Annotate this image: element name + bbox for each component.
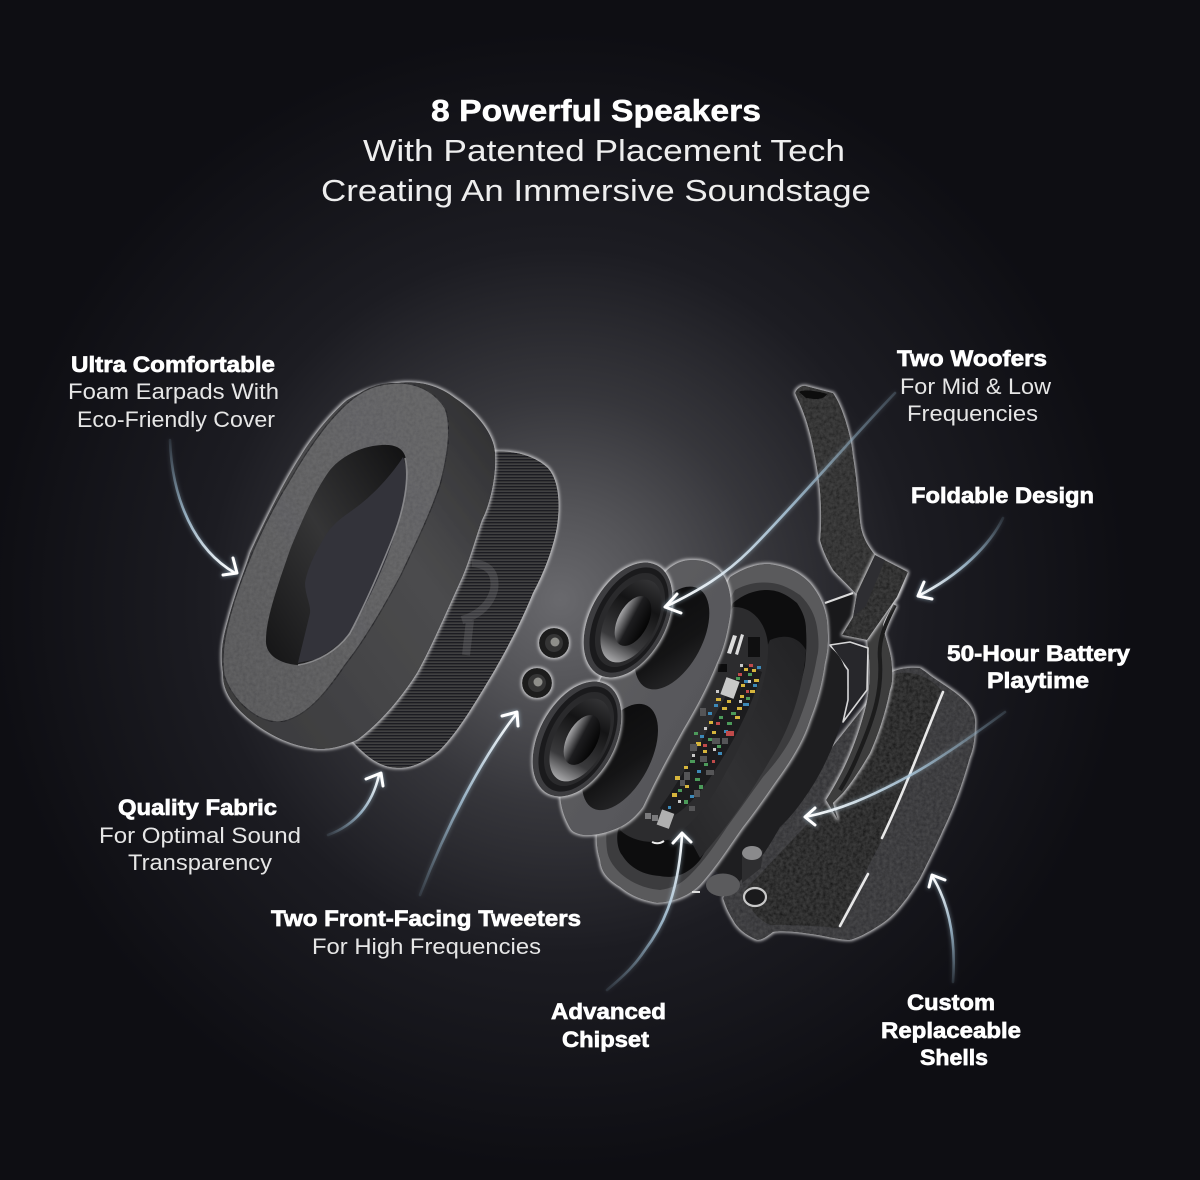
label: tweeters: Two Front-Facing Tweeters — [271, 906, 581, 931]
replaceable shell — [723, 668, 975, 940]
driver housing — [700, 640, 847, 885]
see-through gap — [830, 642, 868, 722]
bezel ring — [597, 564, 828, 903]
title block: With Patented Placement Tech — [363, 133, 845, 168]
label: shells: Custom — [907, 990, 995, 1015]
component shadow band — [660, 664, 762, 818]
fabric mesh disc — [353, 451, 559, 768]
label: ultra comfortable: Ultra Comfortable — [71, 352, 275, 377]
label: shells: Shells — [920, 1045, 988, 1070]
woofer upper — [565, 547, 691, 693]
woofer lower — [514, 666, 640, 812]
shell stripes — [840, 692, 943, 926]
label: tweeters: For High Frequencies — [312, 934, 541, 959]
black chip — [718, 664, 727, 672]
plate holes — [566, 574, 725, 822]
arrow: fabric — [328, 773, 383, 835]
label: quality fabric: Quality Fabric — [118, 795, 277, 820]
label: foldable design: Foldable Design — [911, 483, 1094, 508]
label: ultra comfortable: Eco-Friendly Cover — [77, 407, 275, 432]
speaker plate — [560, 560, 731, 835]
earpad inner cavity — [266, 445, 407, 665]
label: two woofers — [897, 346, 1051, 426]
small bottom chips — [645, 813, 658, 821]
foldable hinge cushion — [842, 555, 908, 640]
label: shells — [881, 990, 1021, 1070]
earpad front ring — [223, 383, 449, 722]
connector block — [825, 593, 870, 645]
arrow: earpads — [170, 440, 237, 575]
label: battery: Playtime — [987, 668, 1089, 693]
earpad — [222, 382, 495, 749]
label: quality fabric: Transparency — [128, 850, 272, 875]
arrow: battery — [805, 712, 1005, 825]
see-through opening — [298, 457, 407, 663]
label: two woofers: Frequencies — [907, 401, 1038, 426]
label: chipset: Chipset — [562, 1027, 650, 1052]
shell inner panel — [745, 673, 941, 928]
ear cup assembly — [514, 386, 975, 940]
icon: tweeters — [522, 628, 569, 698]
earpad side wall — [222, 382, 495, 749]
label: quality fabric: For Optimal Sound — [99, 823, 301, 848]
board components — [672, 668, 759, 797]
bottom chip — [657, 809, 674, 829]
label: two woofers: Two Woofers — [897, 346, 1047, 371]
label: chipset — [551, 999, 666, 1052]
arrow: shells — [929, 875, 954, 982]
board chip — [720, 677, 740, 699]
arrow: woofers — [665, 393, 895, 613]
label: two woofers: For Mid & Low — [900, 374, 1051, 399]
arrow: tweeters — [420, 712, 518, 895]
label: ultra comfortable: Foam Earpads With — [68, 379, 279, 404]
label: battery — [947, 641, 1131, 693]
arrow: chipset — [607, 833, 691, 990]
title block: 8 Powerful Speakers — [431, 93, 761, 128]
label: shells: Replaceable — [881, 1018, 1021, 1043]
bezel lower inner wall — [667, 637, 806, 858]
yoke arm — [826, 572, 908, 820]
bezel second rim — [606, 583, 818, 890]
bezel black interior — [617, 590, 806, 877]
label: battery: 50-Hour Battery — [947, 641, 1131, 666]
capacitors — [727, 634, 744, 655]
connector edge — [825, 593, 853, 603]
title block: Creating An Immersive Soundstage — [321, 173, 871, 208]
label: quality fabric — [99, 795, 301, 875]
title block — [321, 93, 871, 208]
control knob and hardware — [652, 841, 766, 906]
label: ultra comfortable — [68, 352, 279, 432]
label: chipset: Advanced — [551, 999, 666, 1024]
headband — [795, 386, 875, 595]
arrow: foldable — [918, 518, 1003, 599]
circuit board — [620, 607, 768, 842]
label: tweeters — [271, 906, 581, 959]
